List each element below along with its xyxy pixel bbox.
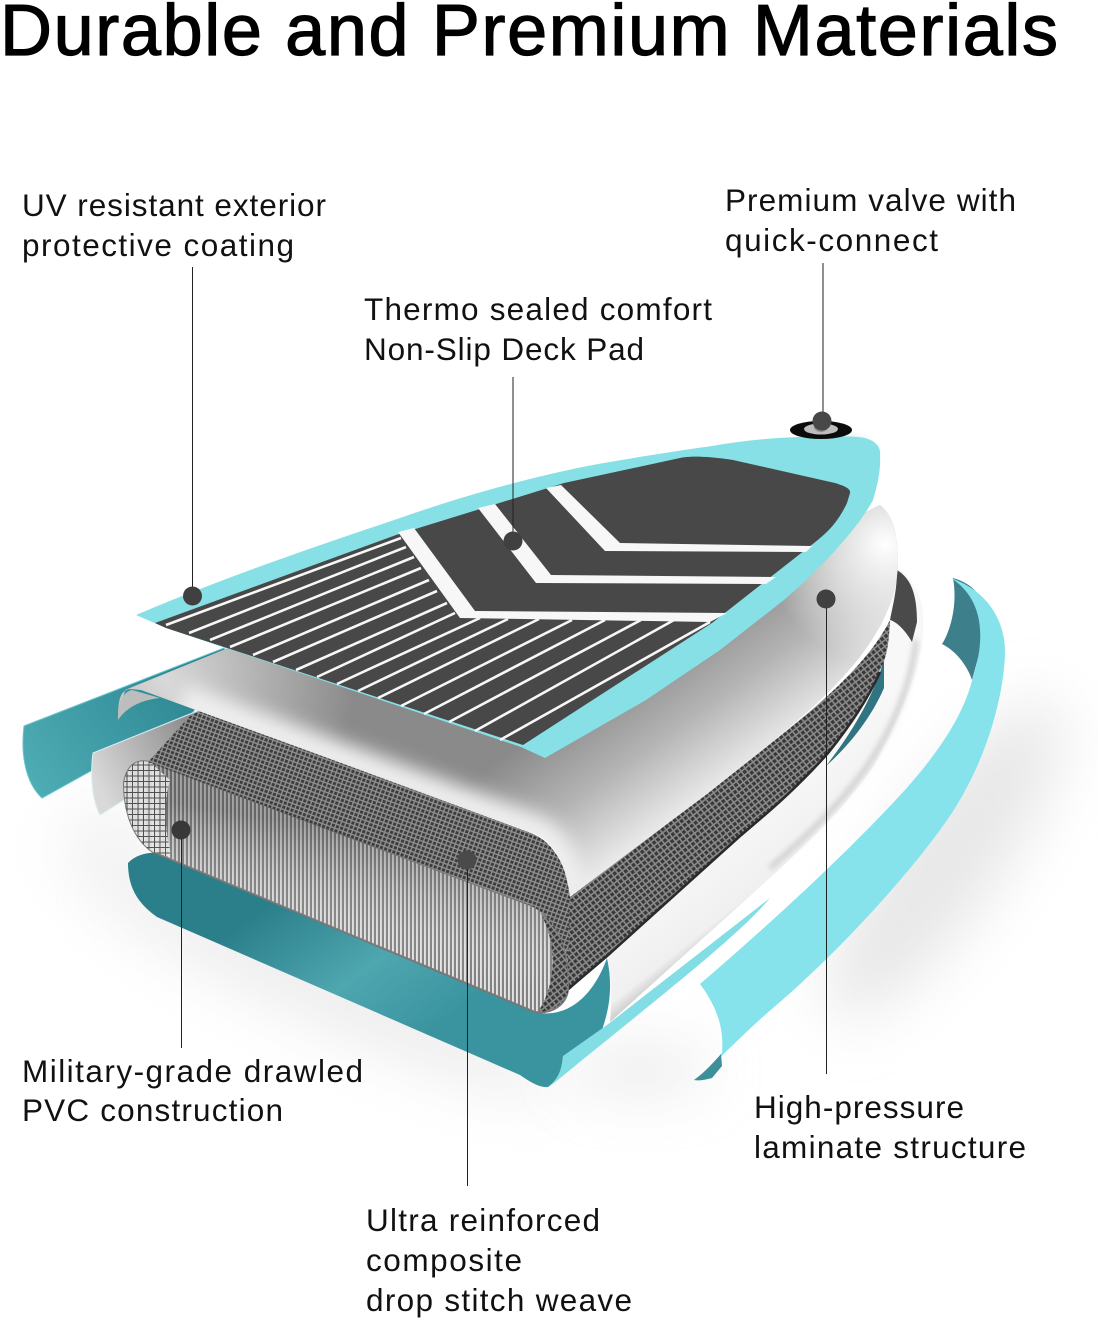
mesh upper surface xyxy=(148,711,570,968)
drop stitch core xyxy=(124,711,570,1012)
label: PVC xyxy=(22,1053,363,1128)
left highlight xyxy=(118,505,898,897)
top end of dark band xyxy=(890,570,917,642)
callout: PVC xyxy=(172,820,190,1048)
label: UV coating: UV resistant exterior xyxy=(22,187,326,223)
bottom teal layer xyxy=(128,853,770,1088)
label: deck pad xyxy=(364,291,712,367)
rail light teal band xyxy=(697,578,1005,1080)
right teal rail xyxy=(694,578,1005,1080)
label: laminate: High-pressure xyxy=(754,1089,964,1125)
callout: UV coating xyxy=(183,267,202,606)
mesh right end xyxy=(538,912,568,1012)
right highlight xyxy=(118,505,898,897)
label: laminate: laminate structure xyxy=(754,1129,1026,1165)
callout: deck pad xyxy=(504,377,522,550)
label: deck pad: Thermo sealed comfort xyxy=(364,291,712,327)
mesh band along the right side xyxy=(567,570,917,992)
lower sheet edge shading xyxy=(770,640,916,868)
label: valve xyxy=(725,182,1016,258)
valve xyxy=(790,421,852,439)
label: drop stitch xyxy=(366,1202,632,1318)
label: valve: Premium valve with xyxy=(725,182,1016,218)
rail tip dark teal xyxy=(694,1054,722,1080)
label: drop stitch: composite xyxy=(366,1242,522,1278)
label: PVC: PVC construction xyxy=(22,1092,283,1128)
label: UV coating: protective coating xyxy=(22,227,294,263)
mesh left end xyxy=(124,761,172,858)
white chevrons xyxy=(398,485,812,622)
label: PVC: Military-grade drawled xyxy=(22,1053,363,1089)
deck pad stripes xyxy=(166,538,710,740)
callout: laminate xyxy=(816,590,836,1074)
rail inner dark teal end xyxy=(942,578,984,680)
label: drop stitch: drop stitch weave xyxy=(366,1282,632,1318)
lower white laminate sheet xyxy=(607,565,923,1022)
label: laminate xyxy=(754,1089,1026,1165)
top laminate sheet xyxy=(118,505,898,897)
valve shadow on deck xyxy=(798,439,866,457)
dark seam line xyxy=(567,672,880,990)
label: UV coating xyxy=(22,187,326,263)
core front stitches xyxy=(124,761,568,1012)
callout: drop stitch xyxy=(458,850,476,1186)
sheet curl underside xyxy=(118,690,160,720)
label: deck pad: Non-Slip Deck Pad xyxy=(364,331,644,367)
core shading xyxy=(124,761,568,1012)
callout: valve xyxy=(812,263,832,430)
lower edge highlight xyxy=(180,700,568,895)
teal deck top layer xyxy=(136,436,880,758)
label: drop stitch: Ultra reinforced xyxy=(366,1202,600,1238)
label: valve: quick-connect xyxy=(725,222,938,258)
back-left teal rail strip xyxy=(23,648,232,798)
inner dark teal sliver xyxy=(826,660,884,766)
light teal bottom edge strip xyxy=(548,898,770,1088)
dark non-slip deck pad xyxy=(155,457,850,745)
second grey laminate sheet xyxy=(92,710,210,815)
